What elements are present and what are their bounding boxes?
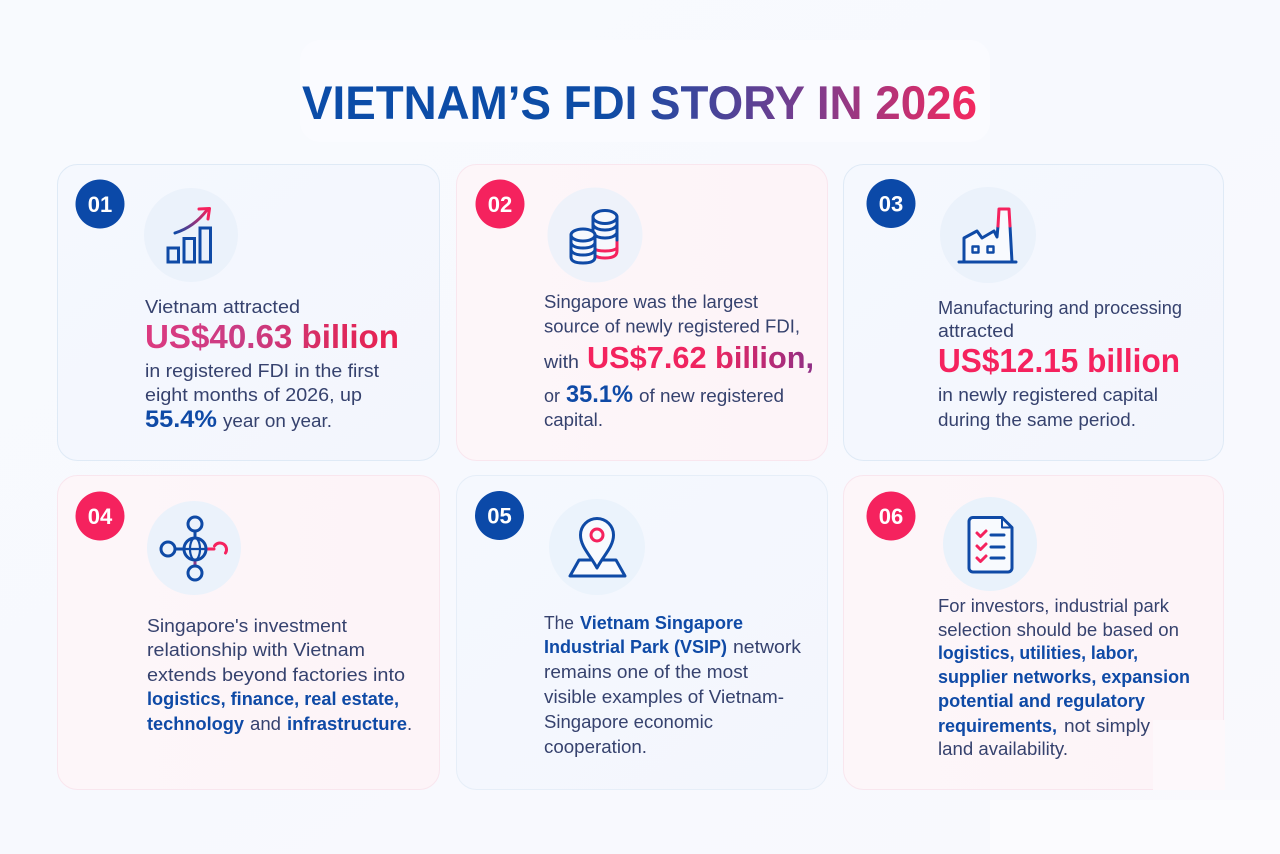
text block 03: in newly registered capital [938,384,1158,405]
icon: coin stacks [548,188,642,282]
badge 03: 03 [879,192,903,216]
text block 04: logistics, finance, real estate, [147,688,399,709]
text block 04: and [250,713,281,734]
panel: card 04 investment relationship [58,476,440,790]
text block 01: year on year. [223,410,332,431]
text block 06: requirements, [938,715,1057,736]
text block 02: source of newly registered FDI, [544,316,800,336]
text block 03: attracted [938,320,1014,341]
badge 04 [76,492,124,540]
badge 01 [76,180,124,228]
panel: card 02 Singapore source [456,164,828,460]
icon: globe network [147,501,241,595]
text block 05: cooperation. [544,736,647,757]
text block 03: during the same period. [938,409,1136,430]
text block 05 [544,612,802,757]
text block 04: relationship with Vietnam [147,639,365,660]
text block 06: For investors, industrial park [938,595,1170,616]
text block 05: Industrial Park (VSIP) [544,636,727,657]
text block 06: not simply [1064,715,1151,736]
text block 01: Vietnam attracted [145,296,300,317]
text block 04 [147,615,412,734]
text block 01: eight months of 2026, up [145,384,362,405]
text block 03: US$12.15 billion [938,342,1180,379]
icon: factory [940,187,1036,283]
text block 04: extends beyond factories into [147,664,405,685]
text block 02: US$7.62 billion, [587,340,814,375]
text block 02: 35.1% [566,381,633,408]
icon: rising bar chart [144,188,238,282]
text block 02 [543,291,814,430]
text block 04: technology [147,713,245,734]
badge 05: 05 [487,504,512,528]
text block 02: Singapore was the largest [544,291,758,312]
text block 05: Singapore economic [544,711,713,732]
panel: card 03 manufacturing [844,164,1224,460]
text block 01: in registered FDI in the first [145,360,379,381]
text block 04: Singapore's investment [147,615,347,636]
text block 06: logistics, utilities, labor, [938,642,1138,663]
text block 01 [145,296,399,433]
text block 05: network [733,636,802,657]
text block 02: of new registered [639,385,784,406]
text block 02: or [544,385,560,406]
text block 02: capital. [544,409,603,430]
text block 04: . [407,713,412,734]
badge 02 [476,180,524,228]
title: VIETNAM’S FDI STORY IN 2026 [302,76,977,129]
text block 03: Manufacturing and processing [938,297,1182,318]
text block 05: The [544,612,574,633]
panel: card 01 registered FDI [58,164,440,460]
text block 06: land availability. [938,738,1068,759]
badge 04: 04 [88,504,113,529]
text block 05: Vietnam Singapore [580,612,743,633]
badge 01: 01 [88,192,112,217]
text block 06: selection should be based on [938,619,1179,640]
badge 02: 02 [488,192,512,217]
text block 03 [938,297,1182,430]
text block 02: with [543,351,579,372]
badge 03 [866,179,916,228]
panel: card 05 VSIP [456,476,828,790]
icon: map pin [549,499,645,595]
badge 05 [475,491,524,540]
text block 06: supplier networks, expansion [938,666,1190,687]
text block 04: infrastructure [287,713,407,734]
text block 05: visible examples of Vietnam- [544,686,784,707]
badge 06 [866,492,916,540]
text block 01: 55.4% [145,406,217,433]
panel: card 06 investor selection [844,476,1225,790]
text block 01: US$40.63 billion [145,318,399,355]
text block 06: potential and regulatory [938,690,1146,711]
icon: checklist document [943,497,1037,591]
badge 06: 06 [879,504,903,529]
text block 05: remains one of the most [544,661,748,682]
text block 06 [938,595,1190,759]
